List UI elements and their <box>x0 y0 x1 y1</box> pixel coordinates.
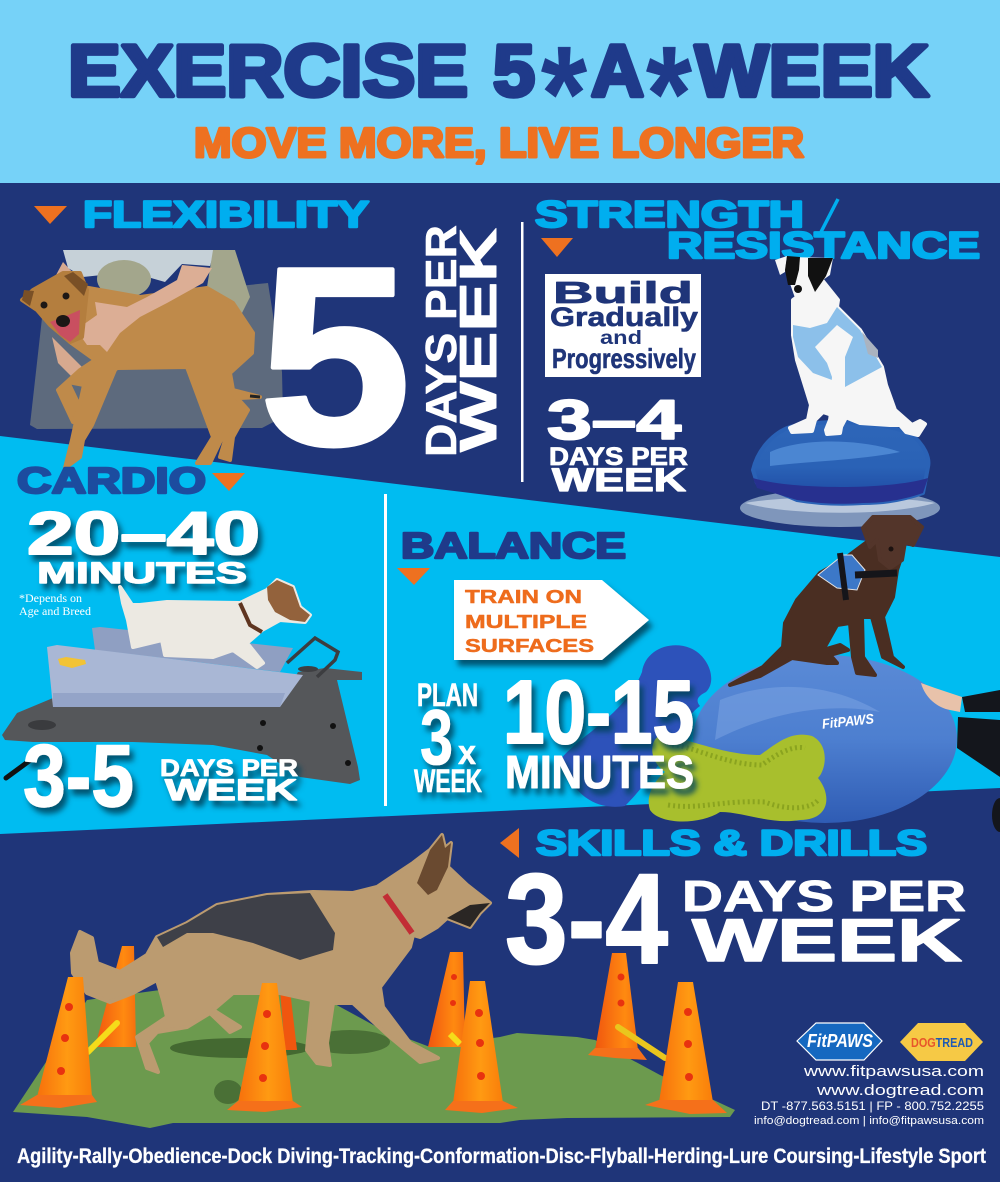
icon: flexibility triangle <box>34 206 67 224</box>
logo: FitPAWS <box>797 1023 882 1060</box>
panel: balance <box>397 517 1000 832</box>
subtitle: MOVE MORE, LIVE LONGER <box>194 119 804 166</box>
cyan diagonal band <box>0 436 1000 834</box>
heading: cardio: CARDIO <box>17 460 206 501</box>
stat: 3-4 days per week: DAYS PER <box>549 443 688 471</box>
illustration: treadmill with dog <box>2 580 362 784</box>
callout: train on multiple surfaces: MULTIPLE <box>465 612 587 632</box>
heading: strength / resistance <box>535 194 980 266</box>
icon: strength triangle <box>541 238 573 257</box>
heading: balance: BALANCE <box>401 525 626 566</box>
stat: 10-15 minutes <box>503 663 694 798</box>
logo: DOGTREAD <box>900 1023 983 1061</box>
stat: 3-4 days per week: WEEK <box>692 907 962 974</box>
rotated label: days per week: WEEK <box>450 227 508 452</box>
heading: strength / resistance: RESISTANCE <box>667 225 980 266</box>
icon: balance triangle <box>397 568 430 585</box>
logo: DOGTREAD: DOGTREAD <box>911 1035 973 1050</box>
header band <box>0 0 1000 183</box>
stat: plan 3x week: PLAN <box>417 677 478 713</box>
stat: 20-40 minutes: 20–40 <box>27 500 260 567</box>
illustration: german shepherd among agility cones <box>13 835 735 1128</box>
callout: train on multiple surfaces: SURFACES <box>465 636 594 656</box>
stat: plan 3x week <box>414 677 482 799</box>
contact details: www.dogtread.com <box>816 1082 984 1099</box>
rotated label: days per week <box>417 225 508 457</box>
heading: skills and drills: SKILLS & DRILLS <box>536 824 927 863</box>
stat: 20-40 minutes <box>27 500 260 590</box>
heading: strength / resistance: STRENGTH <box>535 194 804 235</box>
logo: FitPAWS: FitPAWS <box>807 1031 873 1051</box>
stat: 3-4 days per week: DAYS PER <box>682 872 966 921</box>
footnote: *Depends on <box>19 591 82 605</box>
title: 5 <box>493 31 535 112</box>
stat: 3-5 days per week: WEEK <box>165 774 297 807</box>
stat: 3-4 days per week: WEEK <box>552 462 686 498</box>
panel: flexibility <box>22 194 508 498</box>
rotated label: days per week: DAYS PER <box>417 225 466 457</box>
callout: build gradually: and <box>600 328 642 349</box>
callout: build gradually: Progressively <box>552 343 696 374</box>
stat: plan 3x week: WEEK <box>414 763 482 799</box>
illustration: balance ball with dog and bones: FitPAWS <box>821 710 875 732</box>
panel: skills and drills <box>13 824 966 1128</box>
contact details: info@dogtread.com | info@fitpawsusa.com <box>754 1115 984 1127</box>
stat: 20-40 minutes: MINUTES <box>37 557 247 590</box>
footnote <box>19 591 91 618</box>
stat: plan 3x week: 3 <box>420 693 453 781</box>
stat: 3-5 days per week <box>23 726 298 825</box>
photo: dog on balance disc <box>740 256 940 527</box>
stat: 3-4 days per week <box>547 388 688 498</box>
stat: 3-4 days per week: 3-4 <box>505 848 668 991</box>
callout: build gradually: Gradually <box>550 302 698 332</box>
heading: flexibility: FLEXIBILITY <box>83 194 369 235</box>
stat: 3-4 days per week: 3–4 <box>547 388 681 451</box>
stat: 3-5 days per week: DAYS PER <box>160 755 298 782</box>
title: A <box>591 31 644 112</box>
callout: build gradually: Build <box>553 275 693 310</box>
title: * <box>646 18 692 169</box>
footnote: Age and Breed <box>19 604 91 618</box>
callout: build gradually <box>545 274 701 377</box>
title: EXERCISE <box>68 31 468 112</box>
photo: dog stretching on mat <box>22 250 283 468</box>
contact details <box>754 1063 984 1127</box>
callout: train on multiple surfaces: TRAIN ON <box>465 587 582 607</box>
stat: 10-15 minutes: 10-15 <box>503 663 694 763</box>
icon: cardio triangle <box>212 473 245 491</box>
contact details: DT -877.563.5151 | FP - 800.752.2255 <box>761 1099 984 1113</box>
illustration: balance ball with dog and bones <box>560 517 1000 832</box>
callout: train on multiple surfaces <box>454 580 649 660</box>
icon: skills triangle <box>500 828 519 858</box>
stat: 3-5 days per week: 3-5 <box>23 726 134 825</box>
title: WEEK <box>695 31 929 112</box>
stat: plan 3x week: x <box>458 734 476 772</box>
divider <box>384 494 387 806</box>
stat: 10-15 minutes: MINUTES <box>505 746 694 798</box>
stat: 3-4 days per week <box>505 848 966 991</box>
title <box>68 18 929 169</box>
big number 5: 5 <box>259 214 411 498</box>
title: * <box>541 18 587 169</box>
contact details: www.fitpawsusa.com <box>803 1063 984 1080</box>
panel: cardio <box>2 460 362 825</box>
panel: strength / resistance <box>535 194 980 527</box>
divider <box>521 222 524 482</box>
